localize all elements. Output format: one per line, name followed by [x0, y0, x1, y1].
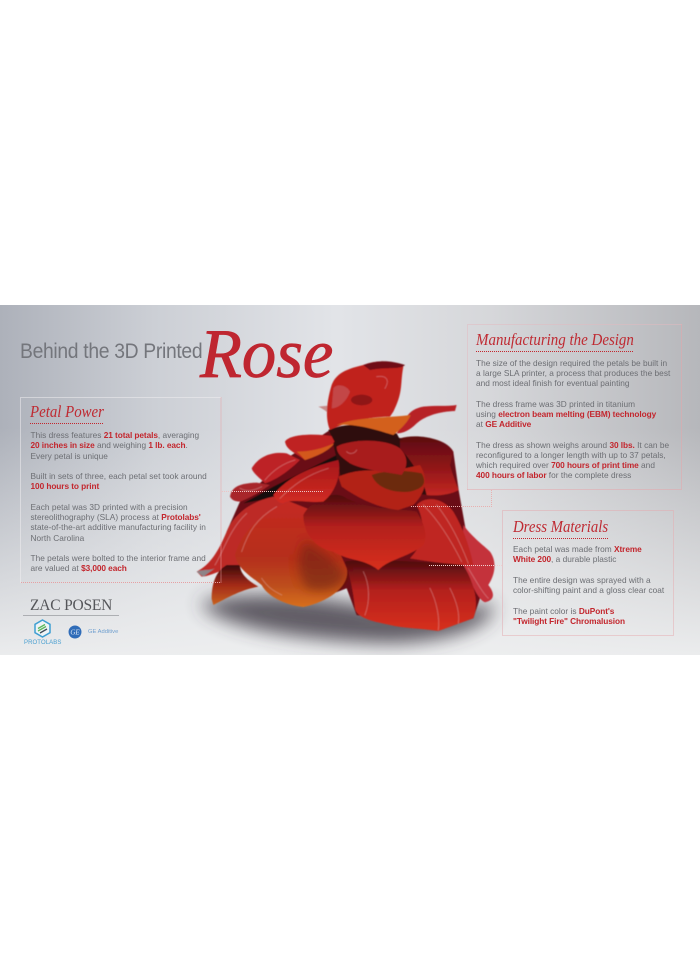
text: petal facts: state-of-the-art additive manufacturing facility in — [30, 522, 206, 532]
text: manufacturing facts: at GE Additive — [476, 419, 531, 429]
petal: mid centre lower — [338, 465, 425, 510]
heading rule: manufacturing — [476, 350, 634, 352]
text: manufacturing facts: reconfigured to a longer length with up to 37 petals, — [476, 450, 666, 460]
text: petal facts: Each petal was 3D printed with a precision — [30, 502, 188, 512]
box outline: materials — [502, 510, 674, 636]
back black gaps — [243, 455, 347, 503]
connector: manufacturing — [411, 490, 492, 506]
connector: petal power — [222, 490, 323, 492]
text: petal facts: The petals were bolted to the interior frame and — [30, 553, 206, 563]
box outline: petal power — [20, 398, 221, 582]
petal: right spike — [397, 405, 457, 433]
text: manufacturing facts — [476, 358, 670, 480]
orange collar — [337, 415, 411, 435]
text: petal facts: Every petal is unique — [30, 451, 108, 461]
text: petal facts: North Carolina — [30, 533, 84, 543]
text: petal facts — [30, 430, 207, 573]
logo: Zac Posen: ZAC POSEN — [30, 597, 112, 614]
text: petal facts: 100 hours to print — [30, 481, 99, 491]
text: materials facts: The entire design was sprayed with a — [513, 575, 651, 585]
text: materials facts: White 200, a durable plastic — [513, 554, 616, 564]
text: materials facts: "Twilight Fire" Chromalusion — [513, 616, 625, 626]
petal: centre front — [303, 495, 425, 570]
solid body under the petals — [227, 430, 483, 630]
icon: GE monogram — [68, 626, 82, 638]
title: Rose: Rose — [200, 316, 333, 393]
petal: far right — [462, 525, 494, 602]
text: manufacturing facts: 400 hours of labor for the complete dress — [476, 470, 631, 480]
petal: left large orange — [235, 502, 347, 607]
petal: mid centre top — [337, 441, 406, 475]
logo: Protolabs wordmark: PROTOLABS — [24, 640, 61, 646]
text: manufacturing facts: and most ideal finish for eventual painting — [476, 378, 630, 388]
petal: top small — [285, 435, 337, 460]
text: petal facts: This dress features 21 total petals, averaging — [30, 430, 199, 440]
petal: small lower left — [212, 565, 258, 605]
petal: back left tip — [197, 497, 290, 577]
icon: GE monogram: GE — [70, 628, 80, 636]
connector lines and box outlines — [20, 324, 682, 636]
connector: materials — [428, 564, 502, 566]
title: lead-in: Behind the 3D Printed — [20, 340, 202, 363]
petal: right tier — [400, 436, 459, 495]
heading: Petal Power: Petal Power — [30, 402, 104, 421]
icon: Protolabs hexagon — [35, 620, 50, 637]
text: petal facts: stereolithography (SLA) process at Protolabs' — [30, 512, 201, 522]
heading rule: petal power — [30, 422, 104, 424]
text: materials facts: The paint color is DuPont's — [513, 606, 614, 616]
top bud dark band — [328, 425, 403, 446]
top bud — [327, 361, 403, 430]
text: manufacturing facts: a large SLA printer, a process that produces the best — [476, 368, 670, 378]
text: manufacturing facts: The dress as shown weighs around 30 lbs. It can be — [476, 440, 669, 450]
text: petal facts: are valued at $3,000 each — [30, 563, 127, 573]
petal: left spike — [318, 406, 328, 413]
text: materials facts: Each petal was made from Xtreme — [513, 544, 642, 554]
heading: Dress Materials: Dress Materials — [513, 517, 608, 536]
logo: GE Additive wordmark: GE Additive — [88, 629, 118, 635]
heading: Manufacturing the Design: Manufacturing the Design — [476, 330, 634, 349]
text: petal facts: Built in sets of three, each petal set took around — [30, 471, 207, 481]
petal highlights — [215, 376, 488, 630]
panel: Petal Power — [30, 402, 207, 573]
petal: right bottom large — [345, 560, 476, 631]
text: manufacturing facts: using electron beam melting (EBM) technology — [476, 409, 656, 419]
panel: Dress Materials — [512, 517, 664, 626]
illustration: 3D printed rose dress — [20, 324, 682, 655]
text: materials facts — [513, 544, 664, 626]
text: manufacturing facts: The size of the design required the petals be built in — [476, 358, 667, 368]
petal: right upper — [410, 499, 473, 565]
background band — [0, 305, 700, 655]
text: petal facts: 20 inches in size and weighing 1 lb. each. — [30, 440, 188, 450]
heading rule: materials — [513, 538, 609, 540]
panel: Manufacturing the Design — [476, 330, 670, 480]
title — [20, 316, 333, 393]
petal: upper left — [252, 453, 300, 483]
petal: mid left — [273, 460, 339, 503]
text: manufacturing facts: which required over 700 hours of print time and — [476, 460, 655, 470]
dress shadow — [200, 595, 493, 643]
logo rule — [23, 614, 119, 616]
text: materials facts: color-shifting paint and a gloss clear coat — [513, 585, 664, 595]
box outline: manufacturing — [468, 324, 682, 490]
petal: far left small — [230, 483, 270, 502]
text: manufacturing facts: The dress frame was 3D printed in titanium — [476, 399, 635, 409]
